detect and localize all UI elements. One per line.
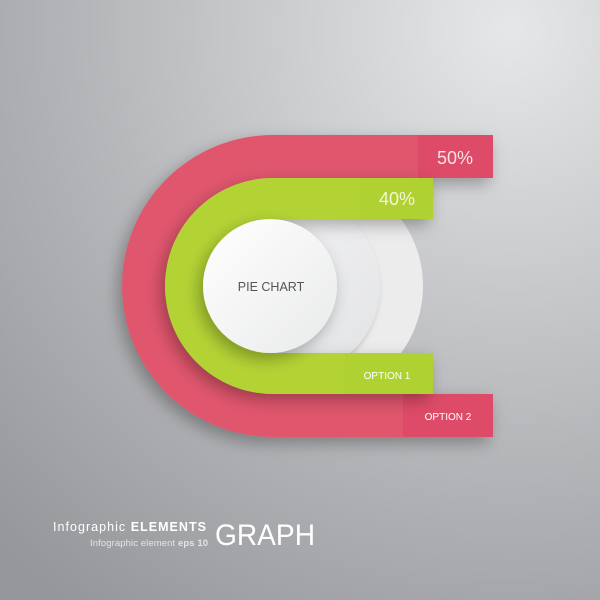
footer text: Infographic ELEMENTS — [53, 520, 206, 534]
footer text: Infographic element eps 10 — [90, 538, 208, 549]
footer text — [53, 519, 315, 552]
center circle: pie chart: PIE CHART — [238, 280, 305, 294]
tab: 40%: 40% — [379, 189, 415, 209]
tab: option 2 — [403, 394, 493, 437]
tab: 50% — [418, 135, 493, 178]
tab: option 2: OPTION 2 — [425, 412, 472, 423]
tab: option 1 — [345, 353, 433, 394]
tab: 40% — [360, 178, 433, 219]
red ring: 50% / option 2 — [122, 135, 493, 437]
tab: 50%: 50% — [437, 148, 473, 168]
center circle: pie chart — [203, 219, 337, 353]
footer text: GRAPH — [215, 519, 315, 552]
background disks — [272, 219, 423, 353]
green ring: 40% / option 1 — [165, 178, 433, 394]
tab: option 1: OPTION 1 — [364, 371, 411, 382]
